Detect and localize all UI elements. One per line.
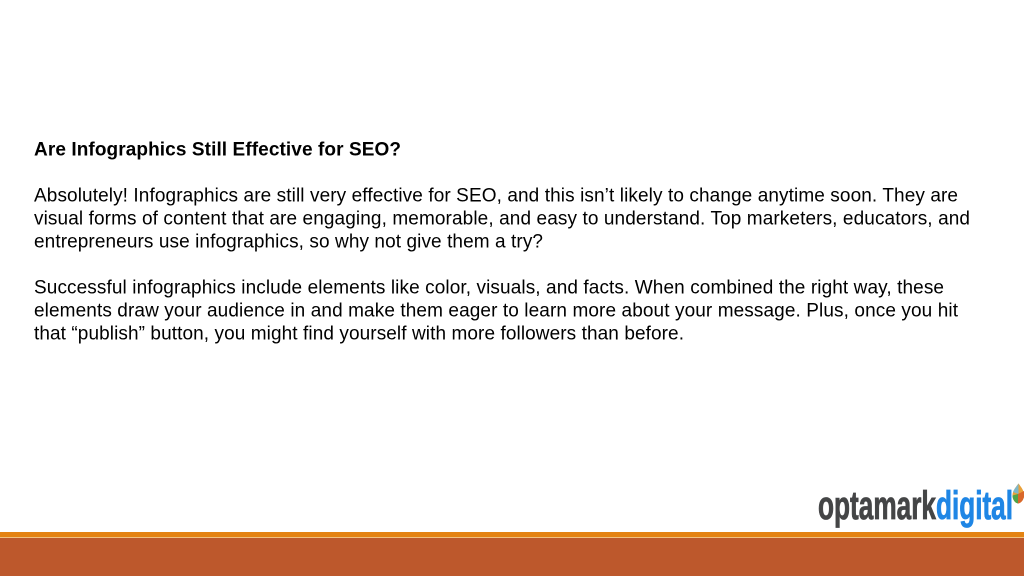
text block: second paragraph — [34, 278, 959, 344]
text block: second paragraph: that “publish” button, you might find yourself with more followers than before. — [34, 324, 684, 344]
text block: first paragraph: entrepreneurs use infographics, so why not give them a try? — [34, 232, 543, 252]
text block: second paragraph: elements draw your audience in and make them eager to learn more about your message. Plus, once you hit — [34, 300, 959, 322]
footer band: rust bar — [0, 538, 1024, 576]
text block: first paragraph — [34, 186, 970, 252]
footer band: light separator — [0, 537, 1024, 538]
logo wordmark: optamark: optamark — [818, 484, 936, 528]
text block: first paragraph: visual forms of content that are engaging, memorable, and easy to understand. Top marketers, educators, and — [34, 208, 970, 230]
logo: optamarkdigital — [818, 484, 1024, 528]
text block: second paragraph: Successful infographics include elements like color, visuals, and facts. When combined the right way, these — [34, 278, 944, 298]
icon: colored droplet — [1012, 484, 1024, 504]
heading: Are Infographics Still Effective for SEO? — [34, 140, 401, 160]
footer band: orange stripe — [0, 532, 1024, 537]
text block: first paragraph: Absolutely! Infographics are still very effective for SEO, and this isn’t likely to change anytime soon. They are — [34, 186, 958, 206]
